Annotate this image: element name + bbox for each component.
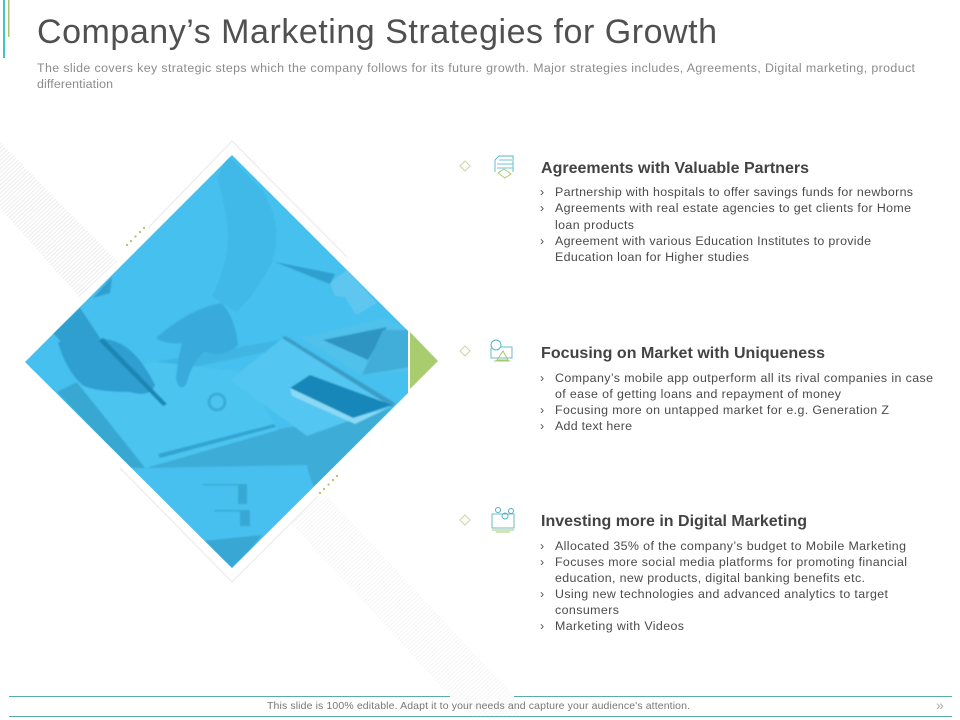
bullet list: consumers <box>555 603 619 617</box>
heading: Agreements with Valuable Partners <box>541 160 809 177</box>
photo: pointing hand <box>156 303 238 387</box>
bullet list <box>540 185 913 264</box>
bullet list: Agreements with real estate agencies to get clients for Home <box>555 201 911 215</box>
diamond photo with blue tint <box>20 150 415 575</box>
bullet list <box>540 539 907 633</box>
bullet list: › <box>540 234 544 248</box>
icon: handshake and document <box>495 156 513 178</box>
title: Company’s Marketing Strategies for Growth <box>37 13 717 51</box>
bullet list: › <box>540 201 544 215</box>
decorative striped band: lower <box>290 494 520 716</box>
photo: laptop keyboard <box>323 327 387 360</box>
photo: edge patch <box>93 277 112 298</box>
bullet list: education, new products, digital banking benefits etc. <box>555 571 865 585</box>
bullet list: Focuses more social media platforms for promoting financial <box>555 555 907 569</box>
bullet list: › <box>540 371 544 385</box>
footer note: This slide is 100% editable. Adapt it to your needs and capture your audience's attention. <box>267 700 690 712</box>
bullet list: Education loan for Higher studies <box>555 250 749 264</box>
bullet list: Company’s mobile app outperform all its rival companies in case <box>555 371 933 385</box>
diamond outline <box>120 141 347 582</box>
photo: laptop body <box>300 318 410 375</box>
icon: magnifier and chart <box>491 340 512 361</box>
section: uniqueness <box>460 340 933 433</box>
photo: ring chart on paper <box>209 394 225 410</box>
subtitle text <box>37 61 916 91</box>
bullet list: › <box>540 587 544 601</box>
decorative striped band: upper <box>0 142 118 298</box>
photo: upper right fingers <box>275 262 335 284</box>
photo: left wrist <box>53 308 100 342</box>
bullet list: Marketing with Videos <box>555 619 684 633</box>
heading: Focusing on Market with Uniqueness <box>541 345 825 362</box>
photo: lower chart <box>203 484 262 568</box>
bullet list: › <box>540 619 544 633</box>
photo: phone <box>290 375 392 418</box>
bullet list: › <box>540 555 544 569</box>
photo: hand holding pen <box>58 338 155 394</box>
photo: lower document <box>132 468 314 566</box>
photo: paper rule <box>158 424 276 458</box>
footer <box>9 696 952 716</box>
subtitle text: The slide covers key strategic steps which the company follows for its future growth. Major strategies includes, Agreements, Digital marketing, product <box>37 61 916 75</box>
bullet list: of ease of getting loans and repayment of money <box>555 387 842 401</box>
bullet list: Partnership with hospitals to offer savings funds for newborns <box>555 185 913 199</box>
photo: arm at top <box>223 156 230 164</box>
photo: notebook <box>242 339 390 436</box>
green triangle <box>410 332 438 389</box>
dotted accents <box>126 227 338 494</box>
marker diamond <box>460 515 470 525</box>
photo: table below paper <box>145 408 392 490</box>
bullet list: Using new technologies and advanced analytics to target <box>555 587 889 601</box>
bullet list: › <box>540 539 544 553</box>
marker diamond <box>460 161 470 171</box>
section: agreements <box>460 156 913 264</box>
photo: paper sheet <box>82 362 277 455</box>
photo: notebook spiral <box>282 336 395 407</box>
photo: desk surface upper <box>160 341 278 366</box>
bullet list <box>540 371 933 433</box>
photo: desk edge shadow <box>57 382 145 468</box>
marker diamond <box>460 346 470 356</box>
next arrows: » <box>936 697 944 713</box>
bullet list: Focusing more on untapped market for e.g. Generation Z <box>555 403 889 417</box>
photo: pen <box>99 338 167 406</box>
bullet list: › <box>540 185 544 199</box>
top accent bars <box>3 0 10 58</box>
bullet list: Add text here <box>555 419 632 433</box>
section: digital marketing <box>460 508 907 633</box>
bullet list: › <box>540 419 544 433</box>
heading: Investing more in Digital Marketing <box>541 513 807 530</box>
subtitle text: differentiation <box>37 77 113 91</box>
photo: laptop lid <box>362 330 410 375</box>
icon: monitor with media <box>492 508 514 532</box>
bullet list: loan products <box>555 218 634 232</box>
bullet list: Allocated 35% of the company’s budget to Mobile Marketing <box>555 539 906 553</box>
bullet list: Agreement with various Education Institutes to provide <box>555 234 871 248</box>
bullet list: › <box>540 403 544 417</box>
